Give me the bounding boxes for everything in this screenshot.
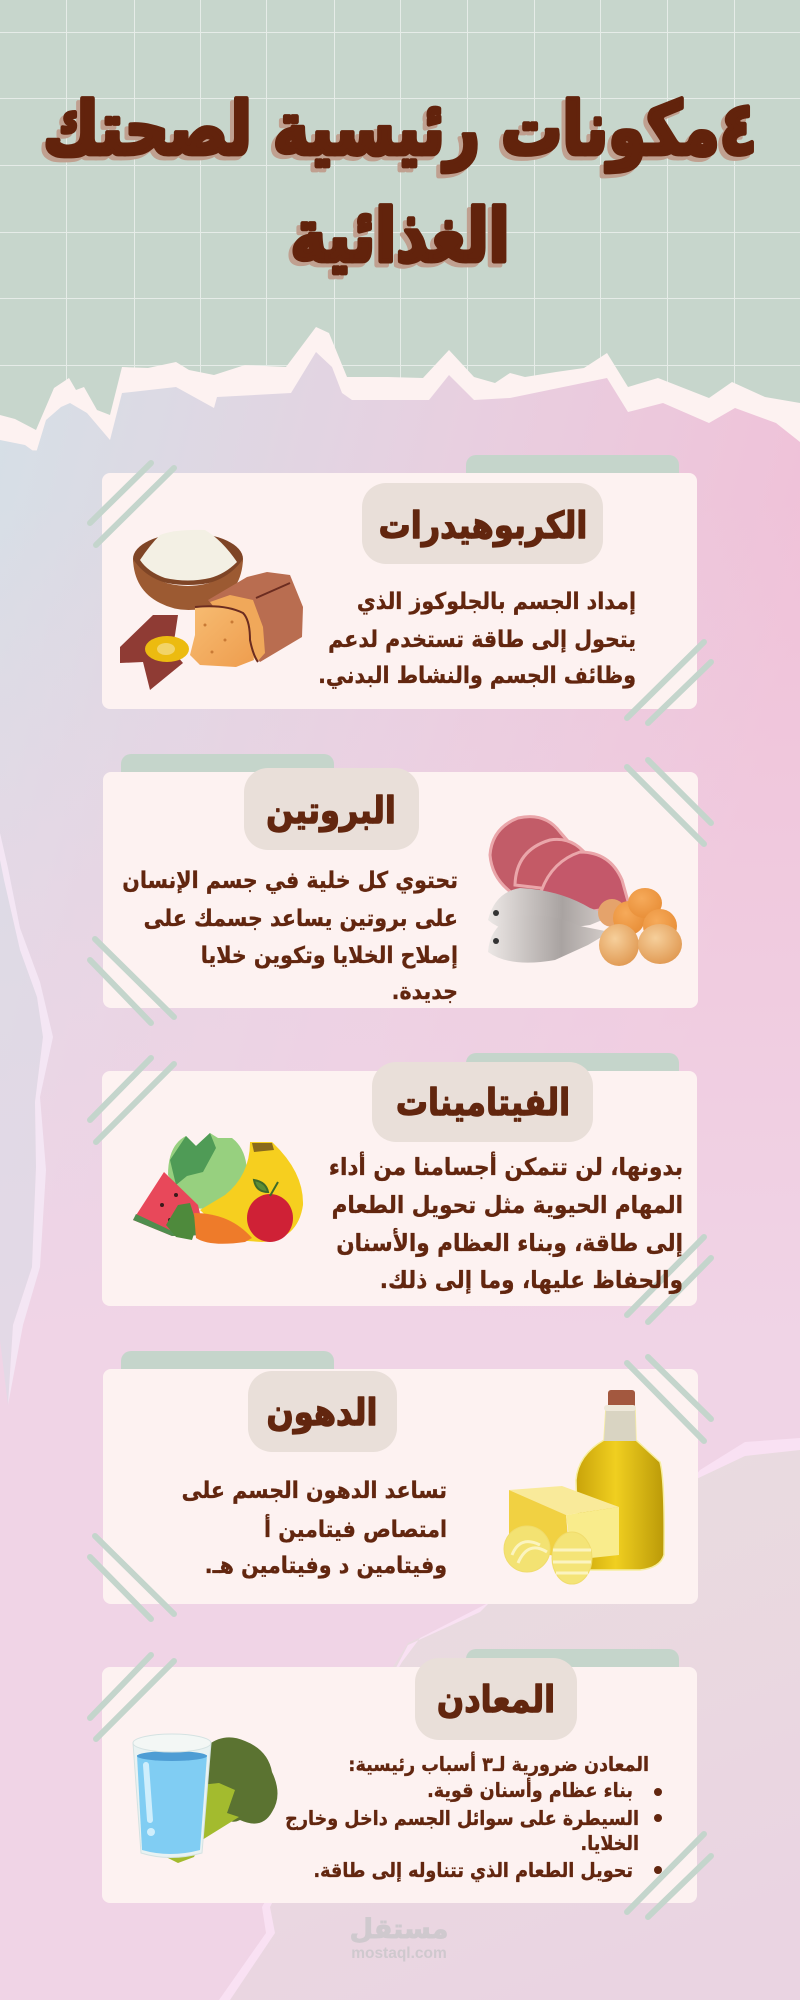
heading box: minerals <box>415 1658 577 1740</box>
text: carbohydrates <box>318 589 636 689</box>
text: minerals: الخلايا. <box>580 1833 639 1855</box>
text: minerals <box>285 1751 662 1883</box>
text: carbohydrates: إمداد الجسم بالجلوكوز الذي <box>357 589 636 615</box>
panel: carbohydrates <box>90 455 711 723</box>
title: ٤مكونات رئيسية لصحتك <box>43 86 757 172</box>
icon: meat, fish and eggs <box>488 817 682 966</box>
torn paper edge <box>0 327 800 500</box>
panel: vitamins <box>90 1053 711 1322</box>
heading box: protein <box>244 768 419 850</box>
text: fats: تساعد الدهون الجسم على <box>182 1478 447 1504</box>
text: minerals: بناء عظام وأسنان قوية. <box>427 1777 633 1802</box>
watermark <box>350 1914 448 1962</box>
watermark: mostaql.com <box>351 1945 447 1962</box>
title: الغذائية <box>290 193 510 278</box>
text: vitamins <box>329 1151 683 1294</box>
panel: fats <box>90 1351 711 1619</box>
text: protein: جديدة. <box>392 979 458 1005</box>
icon: glass of water and broccoli <box>133 1734 278 1863</box>
icon: rice, bread and sweet potato <box>120 530 303 690</box>
text: minerals: المعادن ضرورية لـ٣ أسباب رئيسية: <box>348 1751 649 1776</box>
text: minerals: السيطرة على سوائل الجسم داخل وخارج <box>285 1808 639 1830</box>
text: fats: امتصاص فيتامين أ <box>264 1513 447 1543</box>
heading box: fats <box>248 1371 397 1452</box>
text: vitamins: إلى طاقة، وبناء العظام والأسنان <box>336 1227 683 1257</box>
text: protein: تحتوي كل خلية في جسم الإنسان <box>122 868 458 894</box>
top header panel with grid <box>0 0 800 450</box>
text: carbohydrates: يتحول إلى طاقة تستخدم لدعم <box>328 627 636 653</box>
heading box: carbohydrates: الكربوهيدرات <box>379 505 587 548</box>
text: vitamins: بدونها، لن تتمكن أجسامنا من أداء <box>329 1151 683 1181</box>
text: vitamins: المهام الحيوية مثل تحويل الطعام <box>332 1192 683 1219</box>
text: protein: إصلاح الخلايا وتكوين خلايا <box>201 943 458 969</box>
panel: minerals <box>90 1649 711 1917</box>
icon: oil bottle and butter <box>504 1390 664 1584</box>
text: vitamins: والحفاظ عليها، وما إلى ذلك. <box>380 1267 683 1294</box>
heading box: vitamins <box>372 1062 593 1142</box>
text: fats <box>182 1478 447 1579</box>
watermark: مستقل <box>350 1914 448 1945</box>
text: fats: وفيتامين د وفيتامين هـ. <box>205 1553 447 1579</box>
heading box: protein: البروتين <box>266 790 396 833</box>
text: minerals: تحويل الطعام الذي تتناوله إلى طاقة. <box>313 1860 633 1883</box>
text: protein <box>122 868 458 1005</box>
heading box: vitamins: الفيتامينات <box>396 1082 570 1125</box>
title: الغذائية <box>286 197 506 282</box>
title <box>39 86 757 282</box>
panel: protein <box>90 754 711 1023</box>
heading box: fats: الدهون <box>267 1392 377 1435</box>
heading box: minerals: المعادن <box>437 1679 555 1722</box>
heading box: carbohydrates <box>362 483 603 564</box>
icon: fruit and vegetables <box>133 1133 303 1244</box>
text: carbohydrates: وظائف الجسم والنشاط البدني. <box>318 663 636 689</box>
text: protein: على بروتين يساعد جسمك على <box>144 906 458 932</box>
title: ٤مكونات رئيسية لصحتك <box>39 90 753 176</box>
